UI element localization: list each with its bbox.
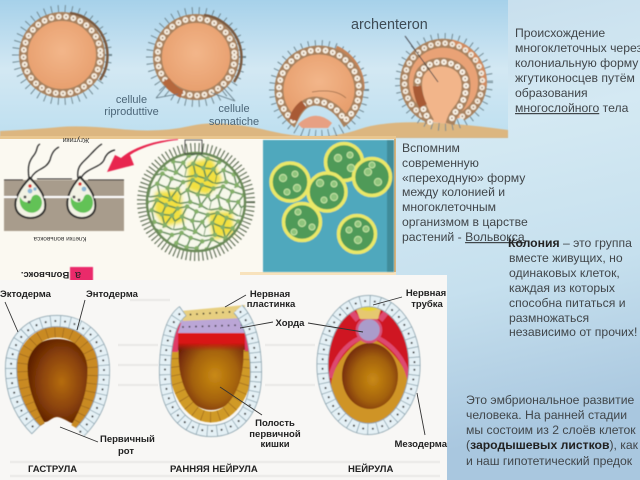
text: origin of multicellular organisms: Происхождение	[515, 26, 605, 40]
sphere 4	[400, 36, 488, 126]
text: colony definition: размножаться	[509, 311, 589, 325]
label: Нервная: Нервная	[406, 288, 446, 299]
text: embryonic development: мы состоим из 2 слоёв клеток	[466, 423, 636, 437]
label: трубка: трубка	[411, 299, 443, 310]
text: colony definition: одинаковых клеток,	[509, 266, 620, 280]
text: embryonic development: (зародышевых листков), как	[466, 438, 639, 452]
sphere 3	[274, 45, 364, 135]
text: volvox note: современную	[402, 156, 479, 170]
label: Полость: Полость	[255, 418, 295, 429]
panel: colony to gastrula illustration	[0, 0, 508, 138]
sphere 2	[151, 12, 242, 102]
text: volvox note: организмом в царстве	[402, 215, 528, 229]
sphere 1	[17, 10, 108, 100]
text: volvox note: «переходную» форму	[402, 171, 526, 185]
text: volvox note: многоклеточным	[402, 200, 496, 214]
text: embryonic development	[466, 393, 639, 468]
red arrow	[107, 139, 178, 172]
label: первичной: первичной	[249, 429, 301, 440]
label: cellule: cellule	[218, 103, 250, 115]
text: colony definition: вместе живущих, но	[509, 251, 623, 265]
label: кишки: кишки	[260, 439, 290, 450]
label: НЕЙРУЛА: НЕЙРУЛА	[348, 463, 393, 475]
text: volvox note: растений - Вольвокса	[402, 230, 525, 244]
volvox sphere	[143, 140, 249, 255]
text: volvox note	[402, 141, 528, 244]
text: colony definition: каждая из которых	[509, 281, 615, 295]
text: colony definition: Колония – это группа	[508, 236, 632, 250]
label: Вольвокс: Вольвокс.	[21, 269, 69, 280]
text: origin of multicellular organisms: жгутиконосцев путём	[515, 71, 635, 85]
label: riproduttive: riproduttive	[104, 106, 159, 118]
panel: volvox illustrations	[0, 136, 396, 282]
text: origin of multicellular organisms: образования	[515, 86, 588, 100]
callout lines	[156, 86, 235, 101]
text: embryonic development: человека. На ранней стадии	[466, 408, 627, 422]
text: volvox note: Вспомним	[402, 141, 460, 155]
text: origin of multicellular organisms	[515, 26, 640, 115]
text: embryonic development: Это эмбриональное развитие	[466, 393, 634, 407]
text: origin of multicellular organisms: колониальную форму	[515, 56, 639, 70]
label: Жгутики: Жгутики	[63, 136, 89, 143]
label: а: а	[74, 269, 81, 281]
label: Нервная: Нервная	[250, 289, 290, 300]
text: origin of multicellular organisms: многослойного тела	[515, 101, 629, 115]
label: ГАСТРУЛА: ГАСТРУЛА	[28, 464, 77, 475]
label: Мезодерма: Мезодерма	[394, 439, 448, 450]
label: somatiche: somatiche	[209, 116, 259, 128]
sand strip	[0, 122, 508, 138]
label: пластинка: пластинка	[247, 299, 296, 310]
label: Энтодерма: Энтодерма	[86, 289, 139, 300]
label: Хорда: Хорда	[276, 318, 305, 329]
label: Эктодерма: Эктодерма	[0, 289, 52, 300]
pointer lines	[5, 295, 425, 442]
label: Клетки вольвокса: Клетки вольвокса	[33, 235, 87, 242]
text: colony definition	[508, 236, 637, 339]
text: embryonic development: и наш гипотетический предок	[466, 454, 633, 468]
label: РАННЯЯ НЕЙРУЛА: РАННЯЯ НЕЙРУЛА	[170, 463, 258, 475]
neurula	[322, 298, 414, 429]
text: origin of multicellular organisms: многоклеточных через	[515, 41, 640, 55]
volvox cell diagram	[4, 144, 124, 231]
early neurula	[165, 305, 256, 431]
label: cellule: cellule	[116, 94, 147, 106]
label: рот: рот	[118, 446, 134, 457]
gastrula	[11, 321, 104, 432]
label: archenteron: archenteron	[351, 17, 428, 33]
panel: embryo development	[0, 275, 448, 480]
text: colony definition: независимо от прочих!	[509, 325, 637, 339]
volvox photo	[263, 140, 394, 272]
label: Первичный: Первичный	[100, 434, 155, 445]
text: volvox note: между колонией и	[402, 185, 505, 199]
pink tag	[70, 267, 93, 282]
text: colony definition: способна питаться и	[509, 296, 626, 310]
